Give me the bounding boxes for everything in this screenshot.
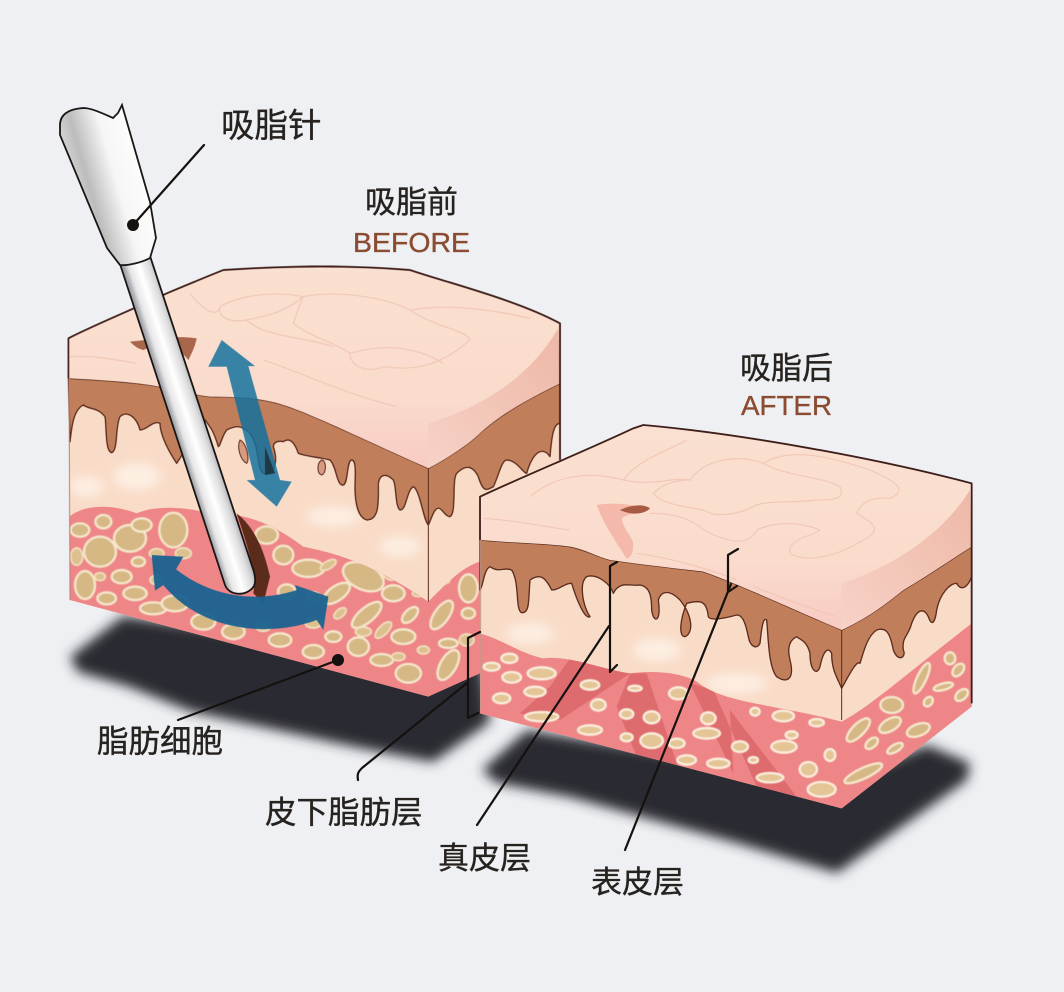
- heading: before: 吸脂前: [365, 185, 458, 220]
- leader: fat cell: [178, 654, 344, 720]
- arrow: vertical motion: [208, 340, 292, 507]
- epidermis right face: [842, 490, 972, 630]
- skin block: before liposuction: [68, 267, 560, 697]
- heading: before: BEFORE: [353, 227, 470, 258]
- epidermis top surface: [480, 425, 972, 630]
- tunnel in fat: [237, 513, 270, 603]
- leader: epidermis: [625, 549, 738, 850]
- cannula shaft: [120, 256, 255, 594]
- drip interior: [239, 440, 325, 475]
- cannula handle: [60, 105, 156, 265]
- dimple: [597, 504, 650, 558]
- heading: after: [740, 351, 833, 421]
- label: fat cells: 脂肪细胞: [97, 723, 223, 759]
- fibrous bands: [520, 658, 797, 797]
- heading: after: AFTER: [741, 390, 832, 421]
- subcutaneous fat layer: [69, 507, 480, 697]
- dermis layer: [480, 540, 972, 808]
- epidermis brown layer with drips: [480, 540, 972, 688]
- arrow: horizontal motion: [152, 555, 328, 630]
- skin cracks: [483, 440, 899, 617]
- skin cracks: [70, 293, 530, 407]
- outline: block: [480, 425, 972, 703]
- subcutaneous fat layer: [480, 623, 972, 808]
- leader: dermis: [477, 562, 617, 825]
- dermis highlights: [507, 623, 767, 693]
- dermis highlights: [70, 463, 420, 557]
- fat cells: [71, 513, 478, 683]
- fat cells: [484, 652, 970, 797]
- outline: left edge: [479, 540, 482, 710]
- incision: [130, 337, 197, 360]
- dimple dark slit: [620, 505, 650, 514]
- leader: cannula: [127, 145, 204, 231]
- epidermis right face: [428, 328, 560, 468]
- liposuction cannula: [60, 105, 255, 594]
- heading: before: [353, 185, 470, 258]
- heading: after: 吸脂后: [740, 351, 833, 386]
- outline: left edge: [67, 378, 71, 600]
- label: epidermis layer: 表皮层: [591, 865, 684, 900]
- dermis layer: [68, 378, 560, 697]
- epidermis brown layer with drips: [68, 378, 560, 525]
- epidermis top surface: [68, 267, 560, 468]
- outline: block: [68, 267, 560, 460]
- shadow: after block: [482, 730, 970, 873]
- arrow dark core: [265, 447, 275, 475]
- label: dermis layer: 真皮层: [438, 841, 531, 876]
- skin block: after liposuction: [480, 425, 972, 808]
- label: cannula: 吸脂针: [221, 108, 322, 145]
- outline: epidermis corner: [840, 630, 843, 720]
- shadow: before block: [70, 616, 490, 762]
- leader: subcutaneous fat: [358, 632, 480, 780]
- label: subcutaneous fat layer: 皮下脂肪层: [265, 794, 423, 830]
- outline: epidermis corner: [427, 468, 430, 602]
